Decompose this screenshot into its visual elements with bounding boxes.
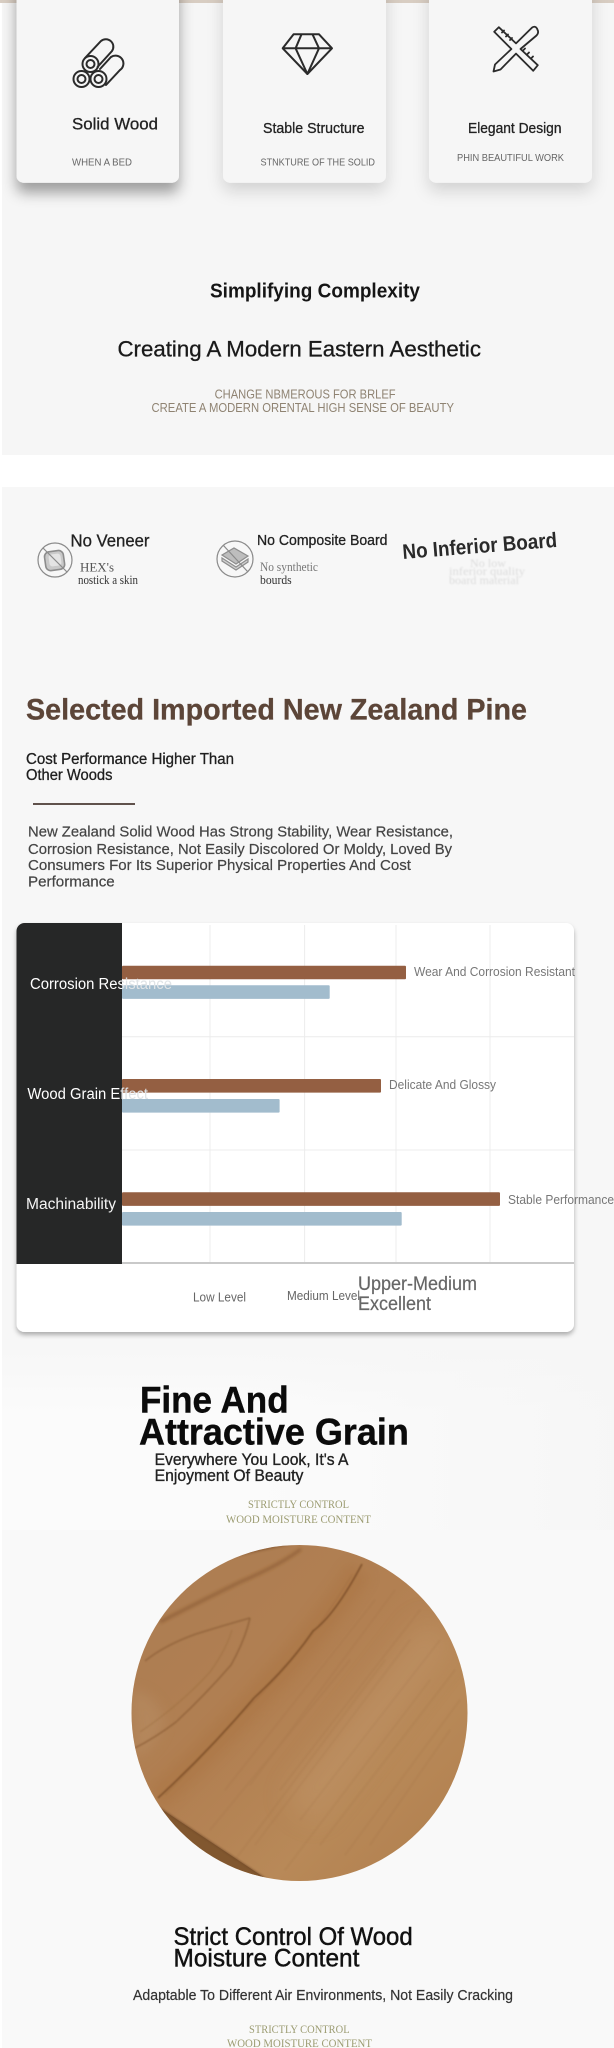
text block: description: Performance (28, 874, 115, 891)
axis label: low level: Low Level (193, 1291, 246, 1305)
panel: feature card elegant design (429, 0, 592, 183)
text block: description (28, 824, 453, 891)
heading: stable structure: Stable Structure (263, 120, 364, 137)
subheading: everywhere you look (155, 1450, 349, 1485)
caption: strictly control upper: STRICTLY CONTROL (248, 1497, 349, 1511)
caption: strictly control upper (226, 1497, 372, 1526)
bars: machinability (122, 1192, 500, 1226)
heading: no veneer: No Veneer (70, 531, 150, 551)
heading: selected imported new zealand pine: Selected Imported New Zealand Pine (26, 693, 527, 726)
image: round wood grain sample (130, 1535, 470, 1890)
axis label: medium level: Medium Level (287, 1289, 360, 1303)
subheading: cost performance (26, 751, 234, 784)
subheading: cost performance: Cost Performance Higher Than (26, 751, 234, 768)
text block: description: Corrosion Resistance, Not Easily Discolored Or Moldy, Loved By (28, 841, 452, 858)
text block: change numerous: CHANGE NBMEROUS FOR BRLEF (215, 388, 396, 402)
text block: description: New Zealand Solid Wood Has Strong Stability, Wear Resistance, (28, 824, 453, 841)
text block: description: Consumers For Its Superior Physical Properties And Cost (28, 857, 412, 874)
panel: no inferior board (402, 529, 558, 587)
text: faded speckled caption: inferior quality (449, 564, 525, 578)
text: no synthetic boards: No synthetic (260, 559, 318, 574)
axis label: upper-medium excellent: Upper-Medium (358, 1274, 477, 1295)
icon: diamond (283, 34, 332, 74)
icon: ruler and pencil (494, 27, 538, 72)
text block: change numerous: CREATE A MODERN ORENTAL HIGH SENSE OF BEAUTY (152, 401, 455, 415)
panel: feature card stable structure (223, 0, 386, 183)
text: no stick a skin: HEX's (80, 560, 114, 575)
heading: strict control of wood moisture content: Strict Control Of Wood (174, 1923, 413, 1951)
heading: fine and attractive grain (139, 1379, 409, 1452)
axis label: upper-medium excellent: Excellent (358, 1294, 432, 1315)
heading: no inferior board: No Inferior Board (402, 529, 558, 564)
bars: corrosion resistance (122, 966, 406, 999)
text: faded speckled caption: board material (449, 573, 520, 587)
panel: feature card solid wood (16, 0, 179, 183)
row label: wood grain effect: Wood Grain Effect (27, 1086, 149, 1103)
text: no stick a skin: nostick a skin (78, 572, 138, 587)
text: no synthetic boards (260, 559, 318, 587)
subheading: cost performance: Other Woods (26, 767, 113, 784)
caption: strictly control lower (227, 2022, 373, 2048)
panel: no composite board (217, 532, 388, 587)
axis label: upper-medium excellent (358, 1274, 477, 1315)
caption: strictly control upper: WOOD MOISTURE CONTENT (226, 1512, 372, 1526)
text: adaptable to different air environments: Adaptable To Different Air Environments, Not Easily Cracking (133, 1987, 513, 2004)
row label: corrosion resistance: Corrosion Resistance (30, 976, 172, 993)
caption: structure of the solid: STNKTURE OF THE SOLID (260, 157, 375, 169)
row label: machinability: Machinability (26, 1196, 116, 1213)
text: no synthetic boards: bourds (260, 572, 292, 587)
heading: fine and attractive grain: Attractive Grain (139, 1410, 409, 1452)
caption: when a bed: WHEN A BED (72, 157, 132, 169)
caption: beautiful work: PHIN BEAUTIFUL WORK (457, 152, 564, 164)
text: faded speckled caption: No low (470, 556, 506, 570)
subheading: everywhere you look: Everywhere You Look, It's A (155, 1450, 349, 1469)
icon: no composite prohibition (217, 541, 253, 577)
icon: no veneer prohibition (38, 543, 72, 577)
bar note: delicate and glossy: Delicate And Glossy (389, 1078, 497, 1092)
heading: solid wood: Solid Wood (72, 114, 158, 134)
heading: creating a modern eastern aesthetic: Creating A Modern Eastern Aesthetic (118, 337, 481, 362)
heading: strict control of wood moisture content (174, 1923, 413, 1972)
heading: strict control of wood moisture content: Moisture Content (174, 1944, 359, 1972)
bar note: wear and corrosion resistant: Wear And Corrosion Resistant (414, 965, 576, 979)
text: no stick a skin (78, 560, 138, 587)
bars: wood grain effect (122, 1079, 381, 1113)
heading: fine and attractive grain: Fine And (140, 1379, 289, 1421)
heading: simplifying complexity: Simplifying Complexity (210, 279, 421, 302)
caption: strictly control lower: STRICTLY CONTROL (249, 2022, 350, 2036)
text block: change numerous (152, 388, 455, 415)
text: faded speckled caption (449, 556, 525, 587)
heading: no composite board: No Composite Board (257, 532, 388, 549)
heading: elegant design: Elegant Design (468, 120, 562, 137)
panel: comparison chart (16, 923, 614, 1332)
icon: logs (74, 39, 123, 87)
panel: no veneer (38, 531, 150, 587)
subheading: everywhere you look: Enjoyment Of Beauty (155, 1466, 304, 1485)
